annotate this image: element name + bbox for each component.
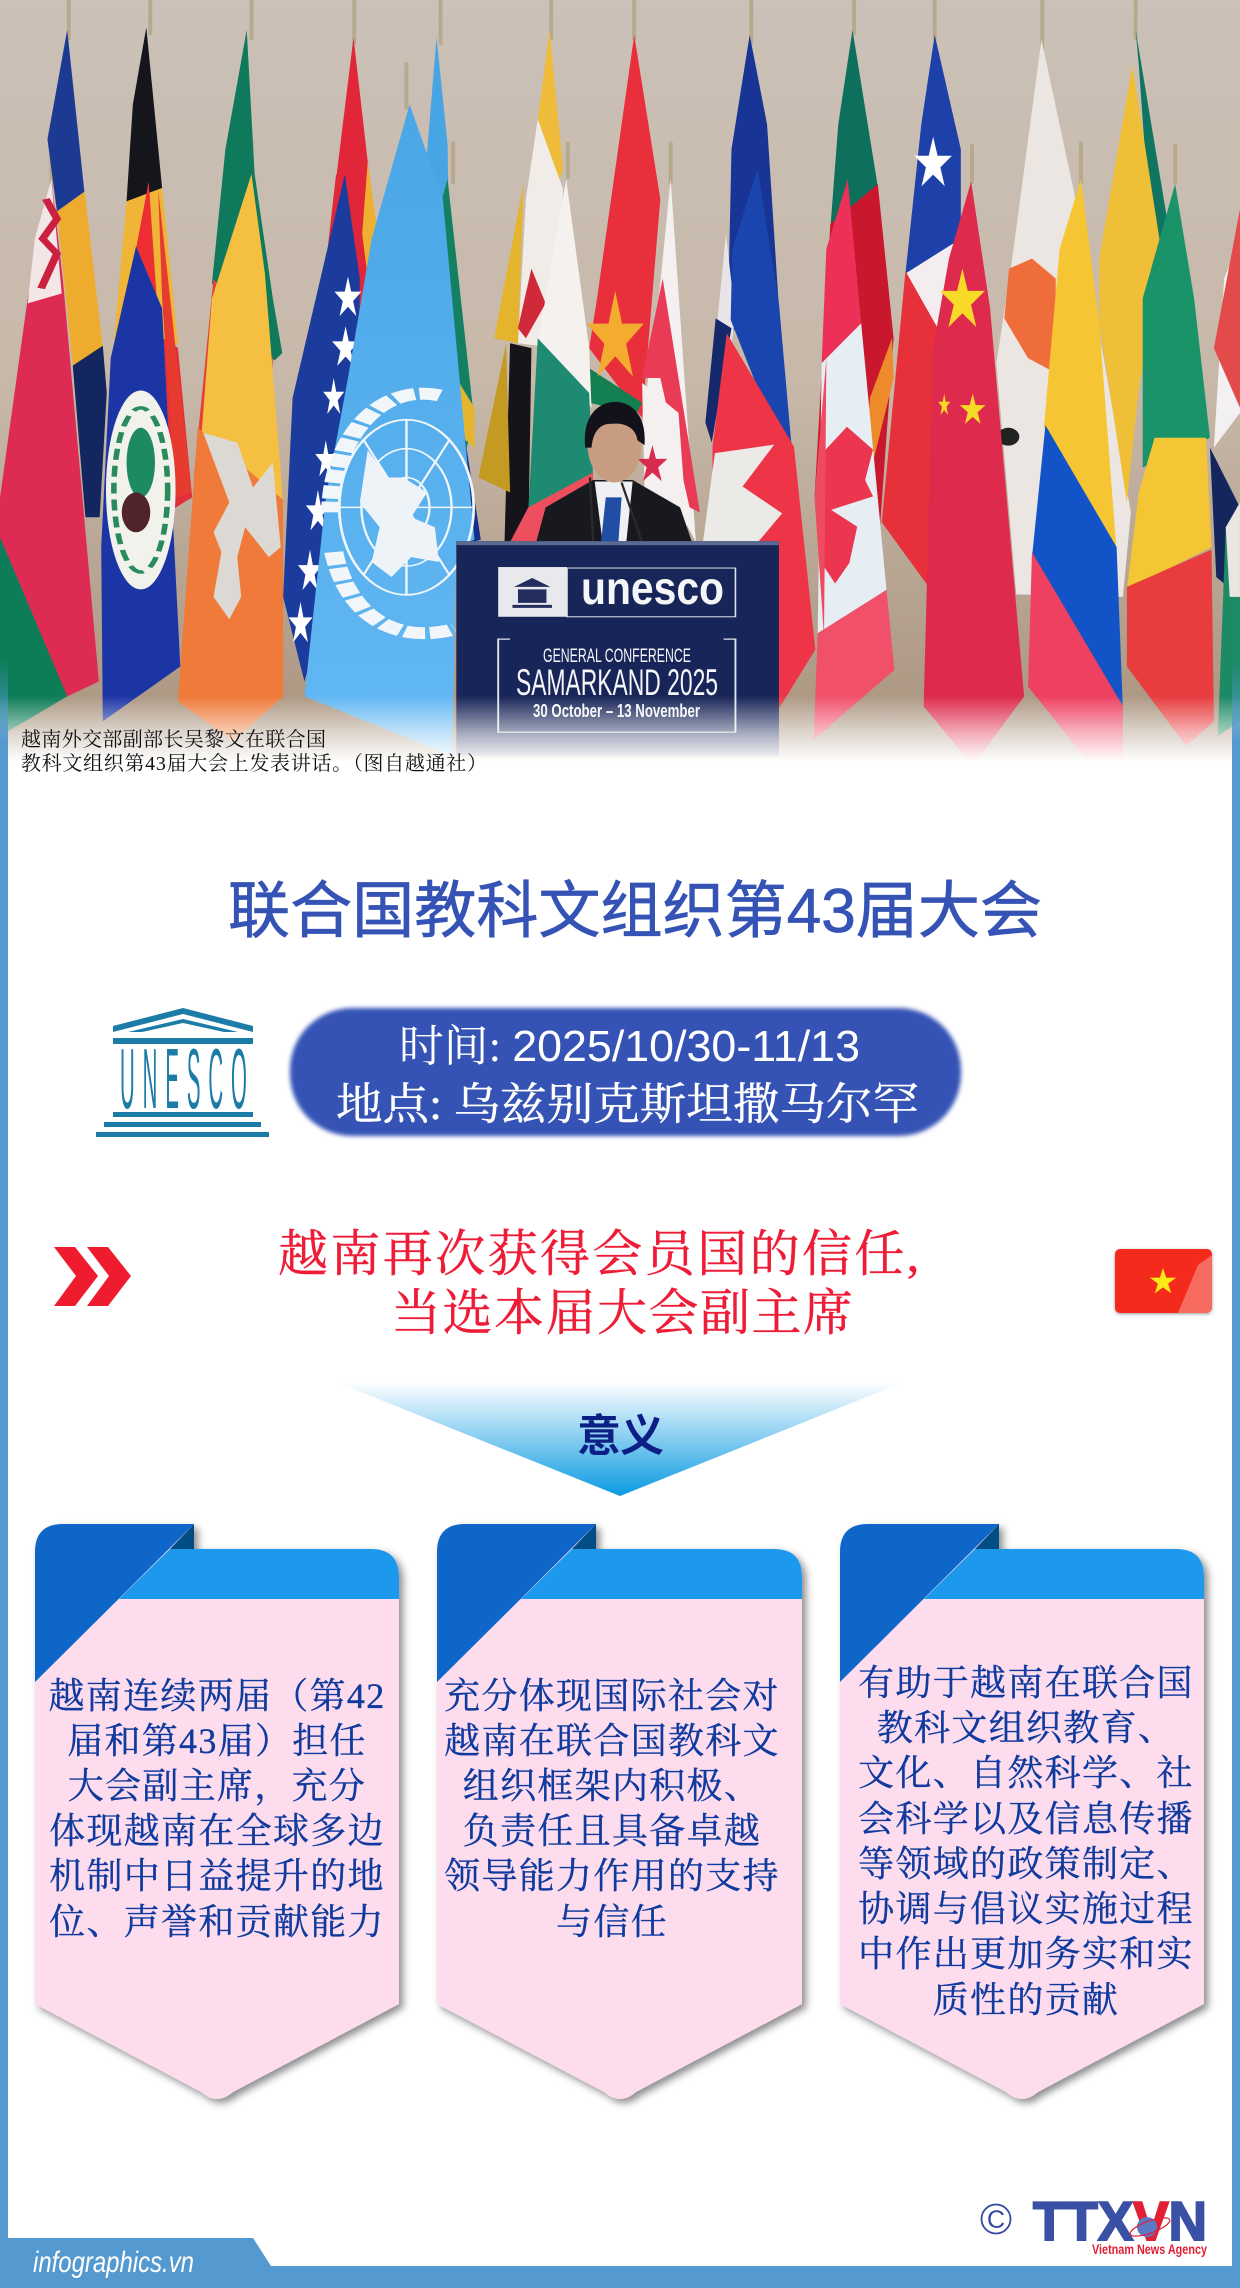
flag: Colombia (1028, 179, 1123, 768)
flag: Canada (814, 179, 894, 740)
podium text (516, 562, 724, 721)
flag poles (51, 0, 1175, 189)
podium text: 30 October – 13 November (533, 701, 700, 721)
flag: back row yellow and green (1099, 30, 1170, 502)
flag: far right edge (1210, 95, 1240, 736)
icon: UNESCO temple logo: UNESCO (120, 1032, 247, 1127)
podium text: SAMARKAND 2025 (516, 662, 718, 703)
card 2 text: 与信任 (556, 1902, 668, 1942)
flag: Burundi (637, 179, 700, 542)
flag: back row Cyprus white (996, 40, 1131, 597)
icon: Vietnam flag (1115, 1249, 1212, 1313)
card 1 text: 体现越南在全球多边 (49, 1811, 385, 1851)
flag: back row green (194, 30, 282, 478)
card 1 text (48, 1676, 386, 1942)
card 3 text: 教科文组织教育、 (877, 1708, 1175, 1748)
photo caption: 越南外交部副部长吴黎文在联合国 (21, 728, 326, 751)
flag: Bosnia (283, 174, 361, 681)
footer band and tab (0, 2238, 1240, 2288)
card 1 text: 机制中日益提升的地 (49, 1856, 385, 1896)
flag: back row Chile (882, 35, 961, 609)
photo: speaker in front of national flags (0, 0, 1240, 791)
card 3 text: 文化、自然科学、社 (858, 1753, 1194, 1793)
card 2 text: 充分体现国际社会对 (444, 1676, 780, 1716)
podium (456, 541, 779, 756)
flag: Bulgaria (510, 179, 593, 542)
headline: Vietnam elected vice president: 当选本届大会副主席 (391, 1285, 854, 1341)
significance triangle banner (336, 1382, 904, 1496)
flag: back row black yellow red (103, 27, 192, 552)
card 1 (35, 1524, 399, 2099)
card 3 text: 质性的贡献 (933, 1980, 1119, 2020)
card 1 text: 越南连续两届（第42 (48, 1676, 386, 1716)
TTXVN logo: TTXVN (1033, 2190, 1207, 2252)
title: 联合国教科文组织第43届大会 (228, 877, 1042, 946)
podium text: GENERAL CONFERENCE (543, 646, 691, 667)
card 1 text: 大会副主席，充分 (68, 1766, 366, 1806)
photo fade to white (0, 696, 1240, 791)
card 2 text (444, 1676, 780, 1942)
card 3 text: 中作出更加务实和实 (858, 1934, 1194, 1974)
card 2 text: 越南在联合国教科文 (444, 1721, 780, 1761)
TTXVN logo: Vietnam News Agency (1092, 2241, 1207, 2257)
flag: Belize (101, 182, 191, 721)
flag: back row green and red (815, 30, 894, 557)
flag: Cambodia (703, 169, 815, 710)
headline: Vietnam elected vice president (278, 1226, 922, 1341)
card 3 text (858, 1663, 1194, 2020)
card 2 text: 负责任且具备卓越 (463, 1811, 761, 1851)
time line: 时间: 2025/10/30-11/13 (399, 1022, 860, 1071)
card 2 text: 组织框架内积极、 (463, 1766, 761, 1806)
flag: back row Barbados-style (47, 30, 107, 517)
icon: UNESCO temple logo (96, 1008, 269, 1137)
flag: United Nations (304, 104, 474, 756)
podium text: unesco (581, 562, 724, 614)
flag: Belarus (0, 179, 99, 736)
page frame: left and right borders (0, 660, 1240, 2288)
card 3 text: 协调与倡议实施过程 (858, 1889, 1194, 1929)
copyright mark: C (987, 2206, 1005, 2234)
flag: Congo (1127, 184, 1214, 746)
flag: back row yellow white albania (478, 30, 563, 542)
icon: red double chevron (54, 1247, 131, 1306)
card 2 (437, 1524, 802, 2099)
speaker (536, 402, 692, 542)
photo caption: 教科文组织第43届大会上发表讲话。（图自越通社） (21, 752, 487, 775)
flag: China (924, 182, 1024, 766)
flag: Bhutan (178, 174, 283, 741)
card 1 text: 位、声誉和贡献能力 (49, 1902, 385, 1942)
time and place pill (290, 1008, 961, 1136)
photo caption (21, 728, 487, 775)
card 3 text: 会科学以及信息传播 (858, 1799, 1194, 1839)
card 2 text: 领导能力作用的支持 (444, 1856, 780, 1896)
card 3 text: 等领域的政策制定、 (858, 1844, 1194, 1884)
banner heading: 意义 (577, 1412, 664, 1461)
copyright mark (982, 2204, 1010, 2234)
headline: Vietnam elected vice president: 越南再次获得会员国的信任, (278, 1226, 922, 1282)
card 1 text: 届和第43届）担任 (67, 1721, 367, 1761)
UN emblem (331, 394, 474, 633)
place line: 地点: 乌兹别克斯坦撒马尔罕 (336, 1080, 919, 1129)
flag: back row light blue and green (419, 37, 481, 547)
card 3 text: 有助于越南在联合国 (858, 1663, 1194, 1703)
flag: back row navy with stripes (705, 35, 779, 443)
card 3 (840, 1524, 1204, 2099)
flag: back row Burkina Faso (587, 35, 660, 418)
footer site name: infographics.vn (33, 2246, 194, 2279)
flag: back row red and yellow (301, 37, 380, 497)
